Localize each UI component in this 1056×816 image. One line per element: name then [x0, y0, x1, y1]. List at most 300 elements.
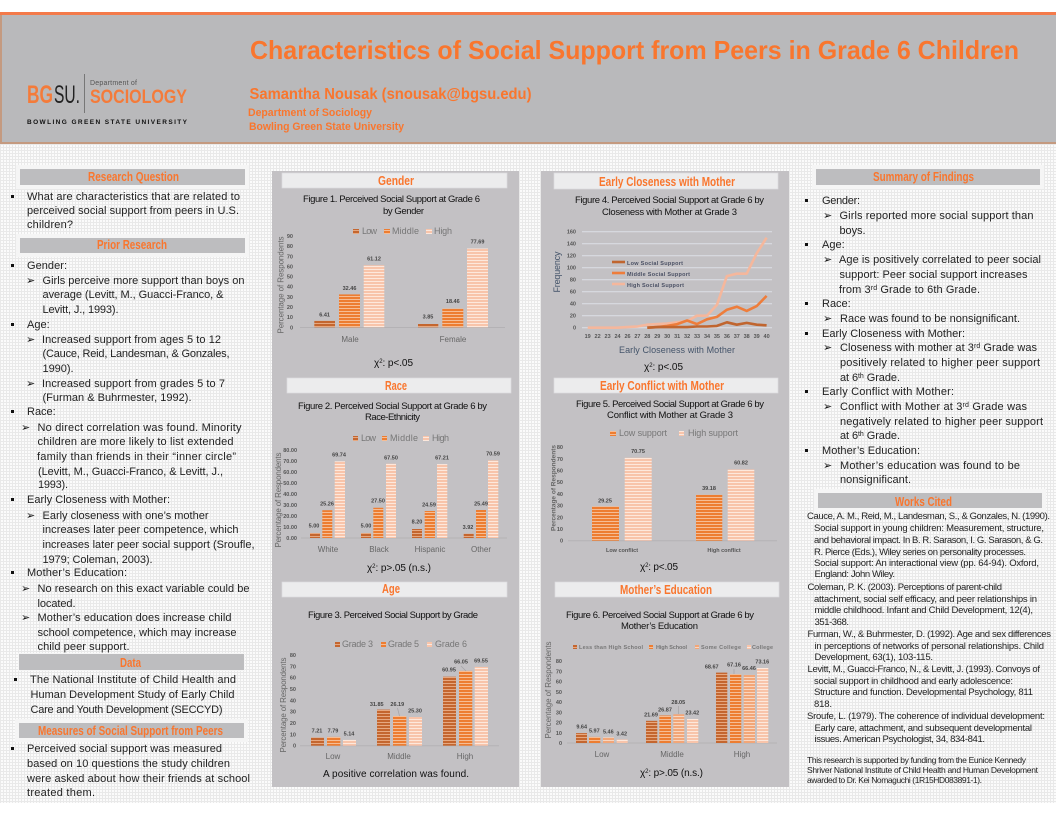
- bar chart: figure 6: 67.16: [727, 663, 741, 669]
- bar chart: figure 2: 60.00: [283, 470, 297, 476]
- text: prior research list: family than friends in their “inner circle”: [37, 451, 236, 463]
- heading: Mother's Education: [555, 582, 779, 597]
- line chart: figure 4: 60: [570, 290, 576, 296]
- bar chart: figure 6: 70: [556, 669, 562, 675]
- text: summary list: Grade was: [980, 342, 1038, 354]
- text: measures: were asked about how their friends at school: [26, 773, 250, 785]
- figure 4 title: Figure 4. Perceived Social Support at Grade 6 by: [575, 195, 764, 206]
- text: summary list: ➢: [823, 253, 832, 266]
- bar chart: figure 6: 0: [559, 741, 562, 747]
- text: measures: [11, 743, 250, 799]
- heading: Data: Data: [120, 656, 142, 670]
- bar chart: figure 5: 60: [557, 468, 563, 474]
- text: prior research list: ➢: [26, 509, 35, 522]
- bar chart: figure 2: 25.49: [474, 502, 488, 508]
- bar chart: figure 3: 10: [290, 732, 296, 738]
- section: Race: [274, 378, 511, 574]
- line chart: figure 4: 31: [674, 334, 680, 340]
- line chart: figure 4: 29: [654, 334, 660, 340]
- text: prior research list: ➢: [26, 333, 35, 346]
- chi-square result: gender: 2: [379, 359, 383, 365]
- bar chart: figure 3: 30: [290, 710, 296, 716]
- poster title: Characteristics of Social Support from Peers in Grade 6 Children: [250, 35, 1019, 65]
- bar chart: figure 1: 60: [287, 264, 293, 270]
- text: prior research list: children are more likely to list extended: [38, 436, 234, 448]
- header banner: [0, 12, 1056, 144]
- bar chart: figure 6: 68.67: [705, 664, 719, 670]
- text: summary list: Girls reported more social support than: [840, 210, 1034, 222]
- heading: Early Closeness with Mother: [554, 173, 778, 189]
- line chart: figure 4: 140: [567, 242, 576, 248]
- bar chart: figure 1: 10: [287, 315, 293, 321]
- bar chart: figure 6: Some College: [701, 645, 741, 651]
- bar chart: figure 5: 70.75: [631, 449, 645, 455]
- bar chart: figure 2: 70.00: [283, 459, 297, 465]
- bar chart: figure 1: 77.69: [471, 239, 484, 245]
- text: references: attachment, social self efficacy, and peer relationships in: [814, 594, 1037, 605]
- text: summary list: boys.: [840, 225, 866, 237]
- line chart: figure 4: Early Closeness with Mother: [619, 345, 735, 355]
- bar chart: figure 2: 30.00: [283, 503, 297, 509]
- text: prior research list: Mother’s education does increase child: [38, 612, 232, 624]
- bar chart: figure 6: Percentage of Respondents: [544, 642, 553, 738]
- figure 1 title: Figure 1. Perceived Social Support at Grade 6: [303, 194, 480, 205]
- heading: Prior Research: [20, 238, 245, 253]
- line chart: figure 4: Middle Social Support: [627, 272, 690, 278]
- section: Gender: [276, 173, 507, 369]
- bar chart: figure 3: 5.14: [344, 732, 355, 738]
- figure 2 title: Figure 2. Perceived Social Support at Grade 6 by: [298, 401, 487, 412]
- bar chart: figure 2: Hispanic: [415, 545, 445, 554]
- text: prior research list: average (Levitt, M., Guacci-Franco, &: [42, 289, 224, 301]
- bar chart: figure 2: 5.00: [309, 524, 319, 530]
- bar chart: figure 6: 80: [556, 659, 562, 665]
- line chart: figure 4: [552, 230, 772, 355]
- bar chart: figure 1: Male: [341, 335, 359, 344]
- figure 2 title: [298, 401, 487, 423]
- bar chart: figure 5: Low conflict: [606, 548, 638, 554]
- logo: BGSU Department of Sociology: Department of: [90, 80, 137, 87]
- text: summary list: th: [858, 431, 864, 438]
- text: prior research list: 1979; Coleman, 2003).: [42, 554, 152, 566]
- section: Mother's Education: [544, 582, 779, 779]
- text: references: Levitt, M., Guacci-Franco, N., & Levitt, J. (1993). Convoys of: [808, 664, 1040, 675]
- bar chart: figure 6: 26.87: [658, 707, 672, 713]
- bar chart: figure 2: 3.92: [463, 525, 473, 531]
- text: summary list: [805, 195, 1043, 486]
- author block: Samantha Nousak (snousak@bgsu.edu): [250, 86, 532, 103]
- bar chart: figure 6: 30: [556, 710, 562, 716]
- bar chart: figure 5: 0: [560, 539, 563, 545]
- text: research question: What are characteristics that are related to: [27, 191, 240, 203]
- caption: age result: A positive correlation was found.: [323, 769, 469, 780]
- chi-square result: education: : p>.05 (n.s.): [648, 768, 703, 779]
- heading: Race: [287, 378, 511, 393]
- figure 5 title: Figure 5. Perceived Social Support at Grade 6 by: [576, 399, 764, 410]
- text: data source: Human Development Study of Early Child: [30, 689, 234, 701]
- bar chart: figure 2: 80.00: [283, 448, 297, 454]
- bar chart: figure 3: Grade 5: [388, 639, 419, 649]
- line chart: figure 4: Frequency: [552, 251, 562, 292]
- bar chart: figure 6: 9.64: [576, 724, 588, 730]
- text: prior research list: Race:: [27, 406, 56, 418]
- text: summary list: Age:: [822, 239, 845, 251]
- bar chart: figure 2: 69.74: [332, 453, 347, 459]
- text: references: Cauce, A. M., Reid, M., Landesman, S., & Gonzales, N. (1990).: [807, 511, 1050, 522]
- figure 3 title: Figure 3. Perceived Social Support by Grade: [308, 610, 478, 621]
- line chart: figure 4: 38: [744, 334, 750, 340]
- bar chart: figure 2: White: [318, 545, 339, 554]
- text: prior research list: 1990).: [42, 363, 74, 375]
- bar chart: figure 2: 25.26: [320, 502, 334, 508]
- text: summary list: ➢: [823, 341, 832, 354]
- chi-square result: gender: χ: [374, 358, 379, 369]
- text: summary list: nonsignificant.: [840, 474, 911, 486]
- chi-square result: race: : p>.05 (n.s.): [375, 563, 431, 574]
- text: prior research list: [11, 260, 254, 653]
- text: prior research list: 1993).: [38, 479, 68, 491]
- bar chart: figure 5: 60.82: [734, 460, 748, 466]
- text: funding acknowledgement: This research is supported by funding from the Eunice Kennedy: [807, 755, 1027, 765]
- bar chart: figure 5: Percentage of Respondents: [550, 445, 558, 531]
- bar chart: figure 1: 61.12: [367, 257, 381, 263]
- panel: charts column 2: [541, 171, 789, 787]
- text: measures: Perceived social support was measured: [27, 743, 222, 755]
- bar chart: figure 3: 60.95: [442, 668, 456, 674]
- bar chart: figure 2: 10.00: [283, 525, 297, 531]
- text: prior research list: ➢: [26, 377, 35, 390]
- chi-square result: conflict: 2: [645, 563, 649, 569]
- line chart: figure 4: 33: [694, 334, 700, 340]
- section: Age: [279, 582, 507, 780]
- text: research question: children?: [27, 219, 73, 231]
- bar chart: figure 6: College: [752, 645, 773, 651]
- text: data source: [14, 674, 236, 716]
- figure 4 title: [575, 195, 764, 218]
- chi-square result: gender: : p<.05: [382, 358, 413, 369]
- text: funding acknowledgement: awarded to Dr. Kei Nomaguchi (1R15HD083891-1).: [807, 775, 982, 785]
- bar chart: figure 6: High School: [656, 645, 687, 651]
- line chart: figure 4: 20: [570, 314, 576, 320]
- text: prior research list: ➢: [21, 582, 30, 595]
- heading: Age: [282, 582, 507, 597]
- left column: [11, 169, 254, 799]
- text: data source: The National Institute of Child Health and: [30, 674, 236, 686]
- line chart: figure 4: 30: [664, 334, 670, 340]
- text: summary list: positively related to higher peer support: [840, 357, 1040, 369]
- text: references: Structure and function. Developmental Psychology, 811: [814, 687, 1033, 698]
- bar chart: figure 6: 20: [556, 720, 562, 726]
- bar chart: figure 2: Black: [369, 545, 390, 554]
- text: references: social support in childhood and early adolescence:: [814, 676, 1013, 687]
- bar chart: figure 2: 67.21: [435, 455, 449, 461]
- text: summary list: Mother’s education was found to be: [840, 460, 1020, 472]
- bar chart: figure 1: Percentage of Respondents: [276, 236, 286, 334]
- line chart: figure 4: 40: [570, 302, 576, 308]
- text: prior research list: Age:: [27, 319, 50, 331]
- text: summary list: rd: [974, 343, 980, 350]
- text: prior research list: Early closeness with one’s mother: [42, 510, 209, 522]
- bar chart: figure 6: 50: [556, 690, 562, 696]
- text: references: Early care, attachment, and subsequent developmental: [814, 723, 1032, 734]
- bar chart: figure 3: 80: [290, 653, 296, 659]
- bar chart: figure 3: Grade 6: [435, 639, 467, 649]
- text: prior research list: (Levitt, M., Guacci-Franco, & Levitt, J.,: [38, 466, 223, 478]
- line chart: figure 4: 28: [644, 334, 650, 340]
- line chart: figure 4: 120: [567, 254, 576, 260]
- line chart: figure 4: High Social Support: [627, 283, 684, 289]
- text: references: 818.: [814, 699, 832, 710]
- text: prior research list: ➢: [21, 421, 30, 434]
- text: summary list: Grade.: [864, 430, 900, 442]
- bar chart: figure 2: 27.50: [371, 499, 385, 505]
- text: prior research list: Mother’s Education:: [27, 567, 127, 579]
- bar chart: figure 2: 67.50: [384, 455, 398, 461]
- text: references: in perceptions of networks of personal relationships. Child: [814, 641, 1044, 652]
- text: summary list: Conflict with Mother at 3: [840, 401, 962, 413]
- text: prior research list: ➢: [21, 611, 30, 624]
- line chart: figure 4: 22: [595, 334, 601, 340]
- figure 5 title: Conflict with Mother at Grade 3: [607, 410, 733, 421]
- bar chart: figure 1: 40: [287, 285, 293, 291]
- bar chart: figure 5: 39.18: [702, 486, 716, 492]
- bar chart: figure 2: 8.20: [412, 519, 422, 525]
- bar chart: figure 1: High: [434, 226, 452, 236]
- text: summary list: th: [858, 373, 864, 380]
- bar chart: figure 6: Low: [595, 750, 610, 759]
- bar chart: figure 5: 50: [557, 480, 563, 486]
- heading: Research Question: [20, 169, 245, 185]
- line chart: figure 4: 40: [764, 334, 770, 340]
- text: prior research list: Gender:: [27, 260, 67, 272]
- bar chart: figure 2: Percentage of Respondents: [274, 452, 283, 548]
- bar chart: figure 6: 60: [556, 680, 562, 686]
- heading: Early Closeness with Mother: Early Closeness with Mother: [599, 175, 735, 189]
- heading: Prior Research: Prior Research: [97, 238, 167, 252]
- section: Early Closeness with Mother: [552, 173, 778, 373]
- figure 5 title: [576, 399, 764, 421]
- heading: Data: [19, 654, 244, 670]
- line chart: figure 4: 26: [624, 334, 631, 340]
- text: summary list: ➢: [823, 459, 832, 472]
- figure 2 title: Race-Ethnicity: [365, 412, 420, 423]
- bar chart: figure 1: 0: [290, 325, 293, 331]
- text: summary list: Closeness with mother at 3: [840, 342, 974, 354]
- text: summary list: Early Closeness with Mother:: [822, 328, 965, 340]
- figure 4 title: Closeness with Mother at Grade 3: [602, 207, 737, 218]
- bar chart: figure 2: Other: [471, 545, 491, 554]
- heading: Summary of Findings: [816, 169, 1040, 185]
- right column: [805, 169, 1051, 785]
- bar chart: figure 6: 5.46: [603, 729, 614, 735]
- text: summary list: Grade to 6th Grade.: [877, 284, 980, 296]
- heading: Research Question: Research Question: [88, 170, 179, 184]
- bar chart: figure 2: High: [432, 433, 449, 443]
- text: prior research list: school competence, which may increase: [38, 627, 236, 639]
- text: references: issues. American Psychologist, 34, 834-841.: [814, 734, 985, 745]
- text: references: middle childhood. Infant and Child Development, 12(4),: [814, 605, 1033, 616]
- bar chart: figure 1: 20: [287, 305, 293, 311]
- text: research question: perceived social support from peers in U.S.: [27, 205, 239, 217]
- text: references: R. Pierce (Eds.), Wiley series on personality processes.: [814, 547, 1026, 558]
- bar chart: figure 2: Middle: [390, 433, 418, 443]
- line chart: figure 4: 32: [684, 334, 690, 340]
- bar chart: figure 3: 60: [290, 676, 296, 682]
- heading: Age: Age: [382, 582, 400, 596]
- bar chart: figure 6: 28.05: [671, 700, 685, 706]
- text: summary list: from 3: [839, 284, 871, 296]
- bar chart: figure 6: 40: [556, 700, 562, 706]
- text: measures: based on 10 questions the study children: [27, 758, 230, 770]
- text: references: Social support: An interactional view (pp. 64-94). Oxford,: [814, 558, 1039, 569]
- logo: BGSU Department of Sociology: SOCIOLOGY: [90, 87, 187, 108]
- bar chart: figure 3: 7.79: [328, 729, 338, 735]
- bar chart: figure 6: 10: [556, 731, 562, 737]
- chi-square result: conflict: χ: [640, 562, 645, 573]
- text: prior research list: ➢: [26, 274, 35, 287]
- author block: Bowling Green State University: [249, 121, 405, 133]
- bar chart: figure 3: [279, 639, 499, 761]
- text: summary list: ➢: [823, 312, 832, 325]
- text: prior research list: increases later peer competence, which: [42, 524, 238, 536]
- author block: [248, 86, 532, 133]
- bar chart: figure 6: [544, 642, 777, 759]
- bar chart: figure 6: Middle: [660, 750, 684, 759]
- bar chart: figure 3: 70: [290, 664, 296, 670]
- bar chart: figure 3: 40: [290, 698, 296, 704]
- text: references: England: John Wiley.: [814, 569, 895, 580]
- text: summary list: support: Peer social support increases: [840, 269, 1028, 281]
- line chart: figure 4: 35: [714, 334, 720, 340]
- text: prior research list: child peer support.: [38, 641, 130, 653]
- logo: BGSU Department of Sociology: SU.: [54, 81, 80, 109]
- bar chart: figure 1: 50: [287, 275, 293, 281]
- bar chart: figure 3: Grade 3: [342, 639, 373, 649]
- bar chart: figure 6: High: [734, 750, 750, 759]
- chi-square result: conflict: : p<.05: [648, 562, 678, 573]
- heading: Mother's Education: Mother’s Education: [620, 583, 712, 597]
- bar chart: figure 1: 6.41: [319, 313, 330, 319]
- bar chart: figure 3: Low: [326, 752, 341, 761]
- bar chart: figure 1: Female: [440, 335, 467, 344]
- bar chart: figure 5: Low support: [619, 428, 667, 438]
- bar chart: figure 3: 0: [293, 744, 296, 750]
- bar chart: figure 1: 3.85: [423, 314, 433, 320]
- bar chart: figure 5: 40: [557, 492, 563, 498]
- figure 6 title: Mother’s Education: [621, 621, 698, 632]
- text: summary list: Grade.: [864, 372, 900, 384]
- line chart: figure 4: 100: [567, 266, 576, 272]
- figure 1 title: by Gender: [383, 206, 424, 217]
- heading: Gender: Gender: [378, 174, 414, 188]
- chi-square result: race: χ: [367, 563, 372, 574]
- bar chart: figure 2: 40.00: [283, 492, 297, 498]
- bar chart: figure 5: 70: [557, 457, 563, 463]
- line chart: figure 4: 0: [573, 326, 576, 332]
- bar chart: figure 5: High support: [688, 428, 738, 438]
- heading: Early Conflict with Mother: [554, 378, 778, 393]
- text: references: Development, 63(1), 103-115.: [814, 652, 933, 663]
- bar chart: figure 3: 66.05: [454, 659, 468, 665]
- line chart: figure 4: 19: [585, 334, 591, 340]
- text: references: Social support in young children: Measurement, structure,: [814, 523, 1044, 534]
- heading: Works Cited: [818, 493, 1042, 509]
- bar chart: figure 3: 26.19: [390, 702, 404, 708]
- chi-square result: closeness: χ: [644, 362, 649, 373]
- bar chart: figure 3: Middle: [387, 752, 411, 761]
- heading: Summary of Findings: Summary of Findings: [873, 170, 974, 184]
- line chart: figure 4: 80: [570, 278, 576, 284]
- chi-square result: education: χ: [640, 768, 645, 779]
- heading: Measures of Social Support from Peers: Measures of Social Support from Peers: [38, 724, 223, 738]
- text: prior research list: Increased support from ages 5 to 12: [42, 334, 221, 346]
- text: prior research list: (Furman & Buhrmester, 1992).: [42, 392, 192, 404]
- author block: Department of Sociology: [248, 107, 373, 119]
- bar chart: figure 1: 18.46: [446, 299, 460, 305]
- bar chart: figure 5: 20: [557, 515, 563, 521]
- bar chart: figure 2: 0.00: [286, 536, 297, 542]
- text: summary list: rd: [871, 285, 877, 292]
- text: summary list: negatively related to higher peer support: [840, 416, 1043, 428]
- text: summary list: Mother’s Education:: [822, 445, 920, 457]
- bar chart: figure 2: 5.00: [361, 524, 371, 530]
- text: prior research list: Girls perceive more support than boys on: [42, 275, 244, 287]
- bar chart: figure 2: 24.59: [422, 503, 436, 509]
- text: references: [807, 511, 1051, 745]
- figure 6 title: Figure 6. Perceived Social Support at Grade 6 by: [566, 610, 754, 621]
- bar chart: figure 2: [274, 433, 507, 554]
- bar chart: figure 1: 32.46: [343, 286, 356, 292]
- bar chart: figure 5: [550, 428, 777, 554]
- bar chart: figure 1: Middle: [392, 226, 419, 236]
- bar chart: figure 3: 20: [290, 721, 296, 727]
- text: summary list: at 6: [840, 372, 858, 384]
- bar chart: figure 1: 90: [287, 234, 293, 240]
- text: summary list: ➢: [823, 209, 832, 222]
- text: prior research list: (Cauce, Reid, Landesman, & Gonzales,: [42, 348, 230, 360]
- line chart: figure 4: 23: [605, 334, 611, 340]
- logo: BGSU Department of Sociology: [27, 74, 188, 126]
- text: prior research list: increases later peer social support (Sroufle,: [42, 539, 254, 551]
- bar chart: figure 5: 30: [557, 504, 563, 510]
- text: prior research list: Increased support from grades 5 to 7: [42, 378, 225, 390]
- text: references: Sroufe, L. (1979). The coherence of individual development:: [807, 711, 1045, 722]
- logo: BGSU Department of Sociology: BG: [27, 81, 53, 109]
- bar chart: figure 6: 66.46: [742, 666, 756, 672]
- bar chart: figure 1: Low: [362, 226, 378, 236]
- bar chart: figure 3: 69.55: [474, 659, 488, 665]
- logo: BGSU Department of Sociology: BOWLING GREEN STATE UNIVERSITY: [27, 119, 188, 126]
- text: prior research list: Early Closeness with Mother:: [27, 494, 170, 506]
- bar chart: figure 3: 7.21: [312, 729, 322, 735]
- figure 1 title: [303, 194, 480, 217]
- bar chart: figure 1: 80: [287, 244, 293, 250]
- bar chart: figure 6: 73.16: [755, 659, 769, 665]
- text: references: Coleman, P. K. (2003). Perceptions of parent-child: [808, 582, 1002, 593]
- bar chart: figure 3: Percentage of Respondents: [279, 658, 288, 752]
- line chart: figure 4: 37: [734, 334, 740, 340]
- chi-square result: closeness: : p<.05: [652, 362, 683, 373]
- line chart: figure 4: 34: [704, 334, 711, 340]
- heading: Race: Race: [385, 379, 407, 393]
- text: summary list: at 6: [840, 430, 858, 442]
- line chart: figure 4: 24: [614, 334, 621, 340]
- heading: Works Cited: Works Cited: [895, 495, 952, 509]
- bar chart: figure 6: 21.69: [644, 713, 658, 719]
- bar chart: figure 6: Less than High School: [579, 645, 643, 651]
- text: references: and behavioral impact. In B. R. Sarason, I. G. Sarason, & G.: [814, 535, 1043, 546]
- text: funding acknowledgement: [807, 755, 1039, 785]
